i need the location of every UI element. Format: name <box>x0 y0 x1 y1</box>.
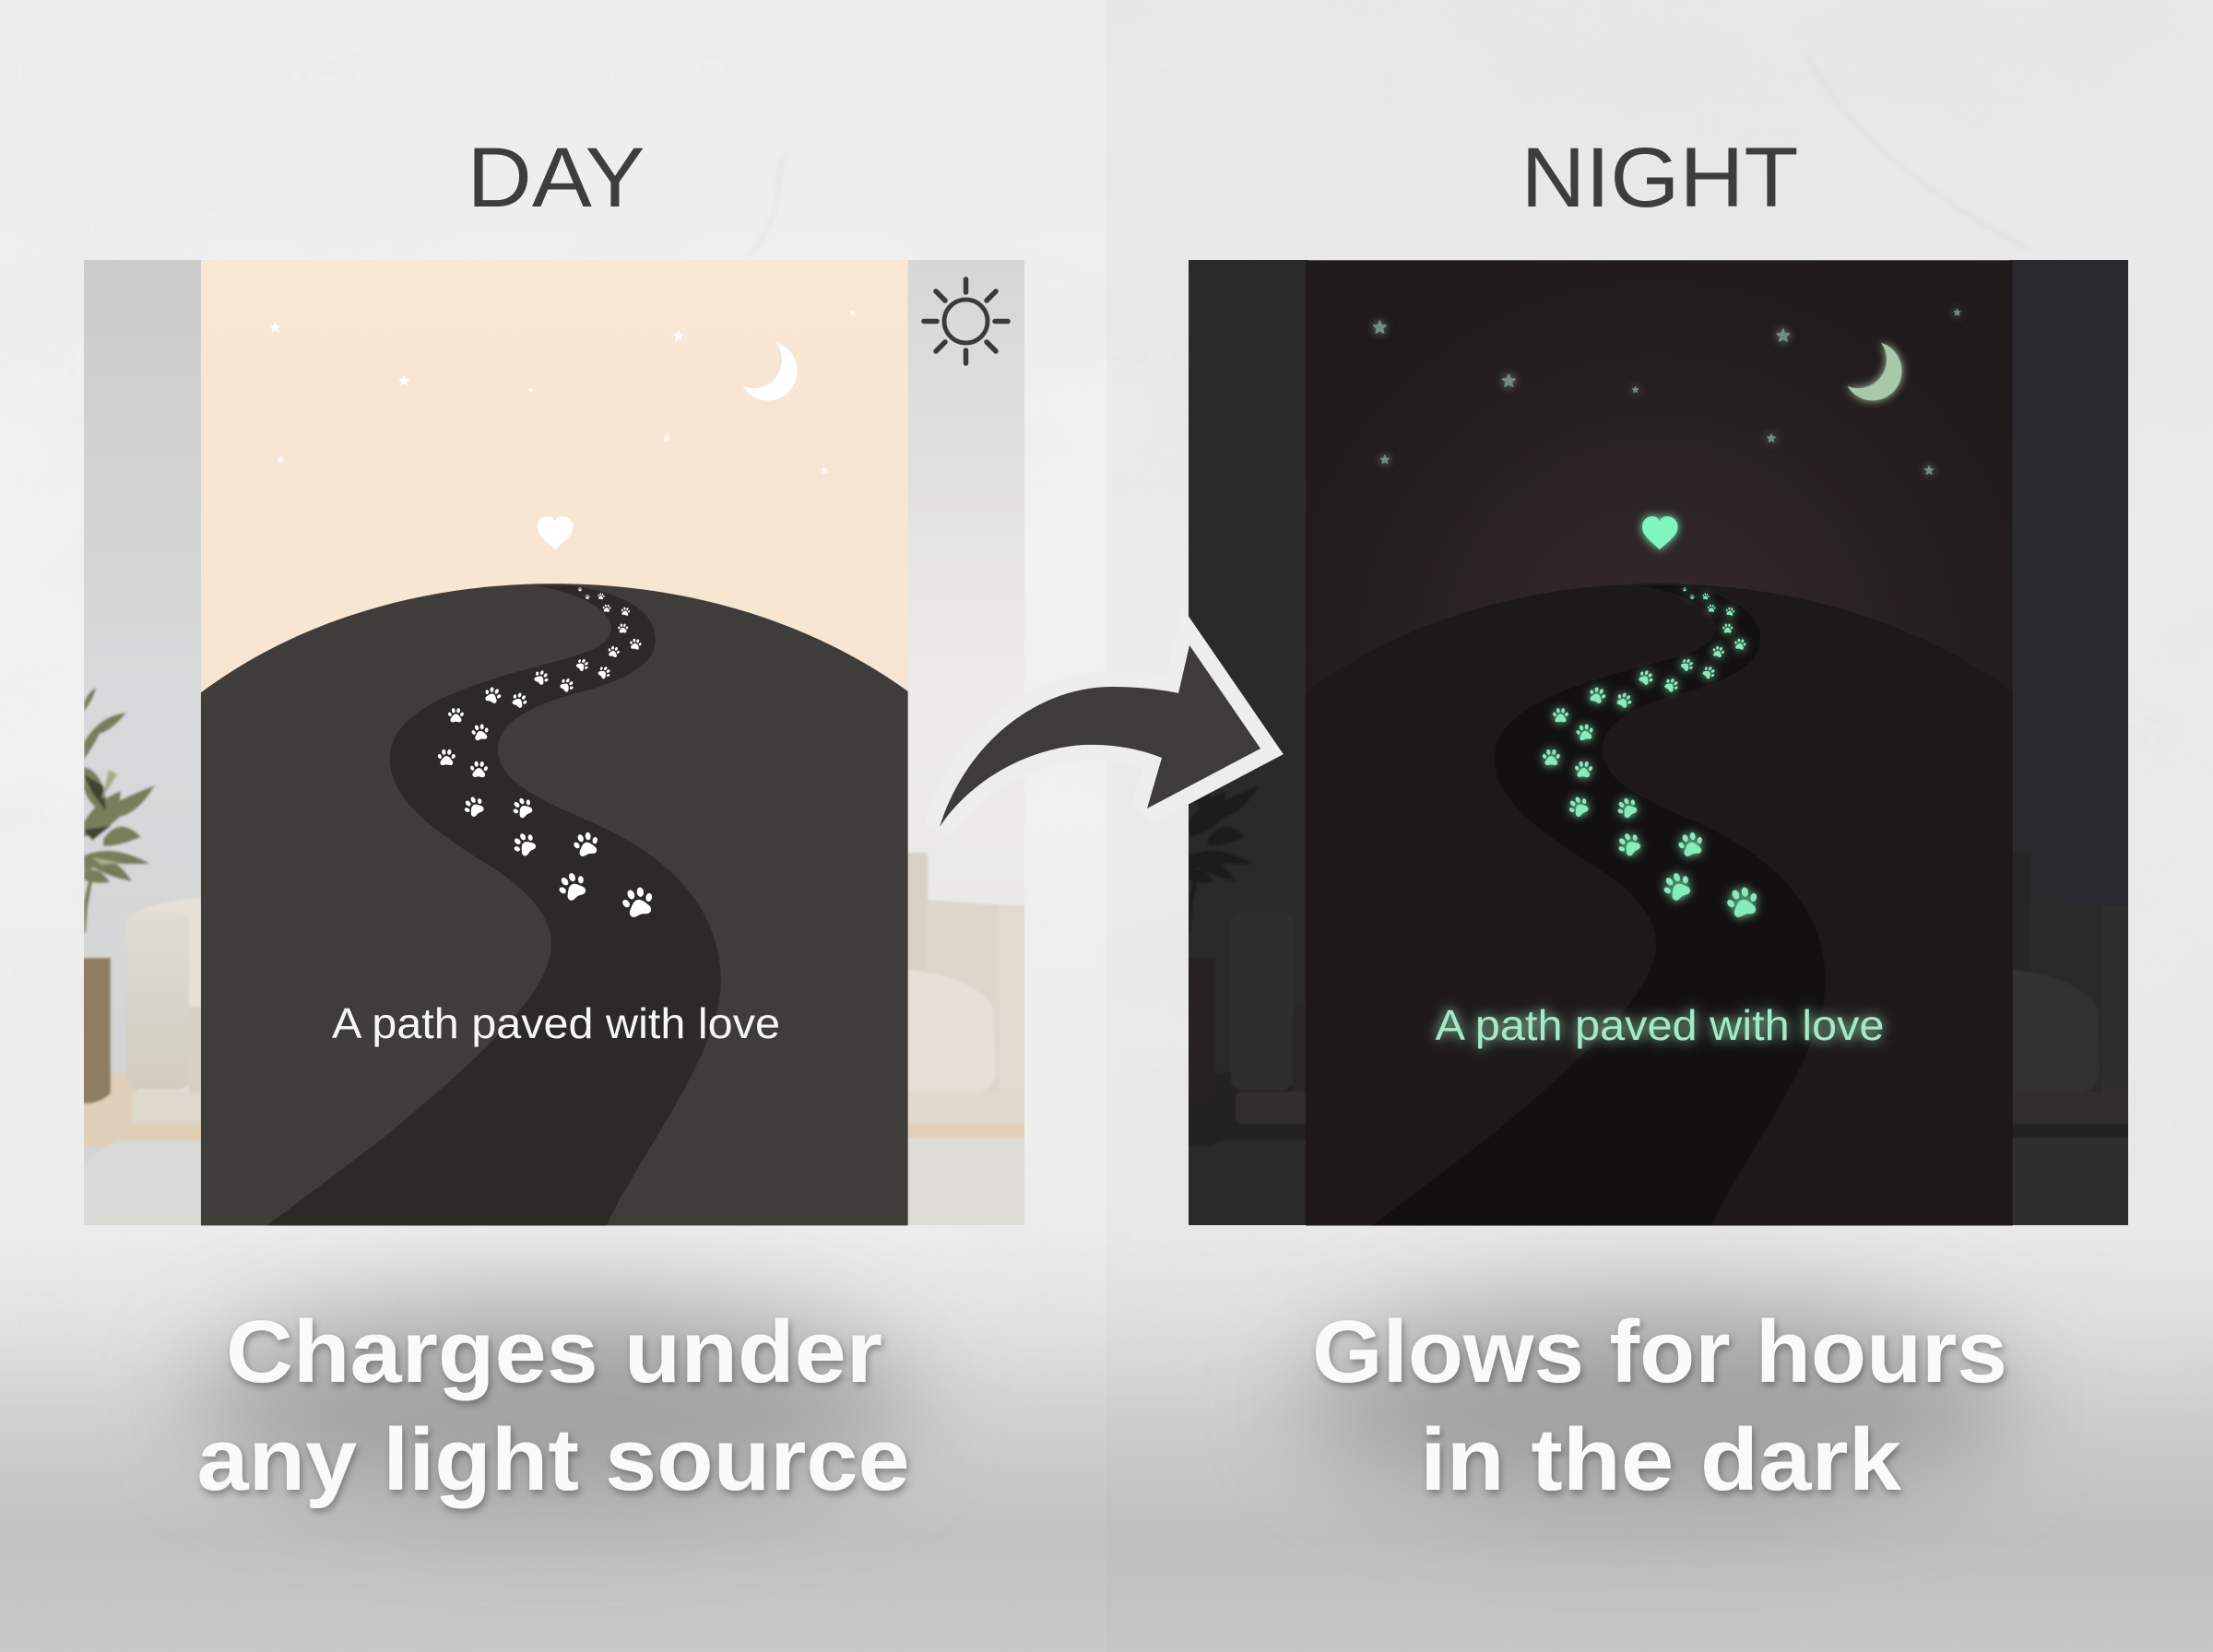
heading: DAY: DAY <box>467 131 645 225</box>
text: night caption: Glows for hours <box>1312 1303 2007 1401</box>
text: day caption: Charges under <box>226 1303 882 1401</box>
dark room background <box>1183 254 2134 1232</box>
text: night caption <box>1312 1303 2007 1509</box>
poster caption: A path paved with love <box>332 999 780 1047</box>
poster sky <box>201 260 908 1225</box>
dark winding path <box>1372 585 1826 1225</box>
paw prints <box>437 587 657 919</box>
winding path <box>267 585 721 1225</box>
glowing caption: A path paved with love <box>1435 1001 1885 1049</box>
icon: sun <box>924 279 1008 363</box>
glowing moon <box>1847 343 1902 401</box>
icon: heart <box>538 516 574 549</box>
text: day caption: any light source <box>197 1410 909 1509</box>
panel: day room <box>78 254 1030 1232</box>
glowing paw prints <box>1542 587 1762 919</box>
poster: day <box>201 260 908 1225</box>
night sky <box>1306 260 2013 1225</box>
heading: NIGHT: NIGHT <box>1521 131 1798 225</box>
text: night caption: in the dark <box>1420 1410 1902 1509</box>
room background left and right of poster <box>78 254 1030 1232</box>
dark hill <box>1306 584 2013 1225</box>
glowing stars <box>1374 309 1960 474</box>
stars <box>269 309 856 474</box>
hill <box>201 584 908 1225</box>
icon: moon <box>742 343 798 401</box>
panel: night room <box>1183 254 2134 1232</box>
text: day caption <box>197 1303 909 1509</box>
glowing heart <box>1642 516 1678 549</box>
arrow: day to night <box>940 645 1260 827</box>
poster: night <box>1306 260 2013 1225</box>
